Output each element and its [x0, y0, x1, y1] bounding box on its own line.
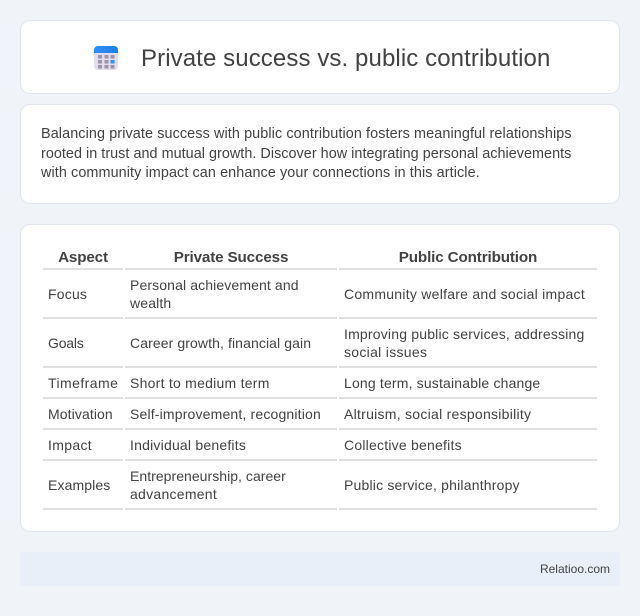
Examples private: advancement	[130, 486, 217, 502]
Impact private: Individual benefits	[130, 437, 246, 453]
table header: Aspect: Aspect	[58, 249, 108, 266]
panel: introduction	[20, 104, 620, 204]
intro text: rooted in trust and mutual growth. Discover how integrating personal achievements	[41, 146, 571, 162]
Goals public: social issues	[344, 344, 427, 360]
table header: Private Success: Private Success	[174, 249, 288, 266]
Goals public	[344, 326, 584, 360]
Impact public: Collective benefits	[344, 437, 462, 453]
Examples private: Entrepreneurship, career	[130, 468, 286, 484]
row: Examples: Examples	[48, 477, 110, 493]
Timeframe public: Long term, sustainable change	[344, 375, 540, 391]
row: Focus: Focus	[48, 286, 87, 302]
panel: title card	[20, 20, 620, 94]
Focus private: Personal achievement and	[130, 277, 299, 293]
row: Timeframe: Timeframe	[48, 375, 118, 391]
row: Goals: Goals	[48, 335, 84, 351]
intro text	[41, 126, 572, 181]
Examples private	[130, 468, 286, 502]
icon: calendar	[94, 46, 118, 70]
intro text: Balancing private success with public contribution fosters meaningful relationships	[41, 126, 572, 142]
Focus private: wealth	[130, 295, 171, 311]
Focus public: Community welfare and social impact	[344, 286, 585, 302]
Goals public: Improving public services, addressing	[344, 326, 584, 342]
footer credit: Relatioo.com	[540, 562, 610, 576]
row: Impact: Impact	[48, 437, 92, 453]
row: Motivation: Motivation	[48, 406, 113, 422]
intro text: with community impact can enhance your connections in this article.	[41, 165, 480, 181]
Motivation public: Altruism, social responsibility	[344, 406, 531, 422]
title: Private success vs. public contribution	[141, 45, 550, 72]
Focus private	[130, 277, 299, 311]
Timeframe private: Short to medium term	[130, 375, 270, 391]
table header: Public Contribution: Public Contribution	[399, 249, 537, 266]
Examples public: Public service, philanthropy	[344, 477, 520, 493]
panel: comparison table	[20, 224, 620, 532]
Motivation private: Self-improvement, recognition	[130, 406, 321, 422]
footer bar	[20, 552, 620, 586]
Goals private: Career growth, financial gain	[130, 335, 311, 351]
